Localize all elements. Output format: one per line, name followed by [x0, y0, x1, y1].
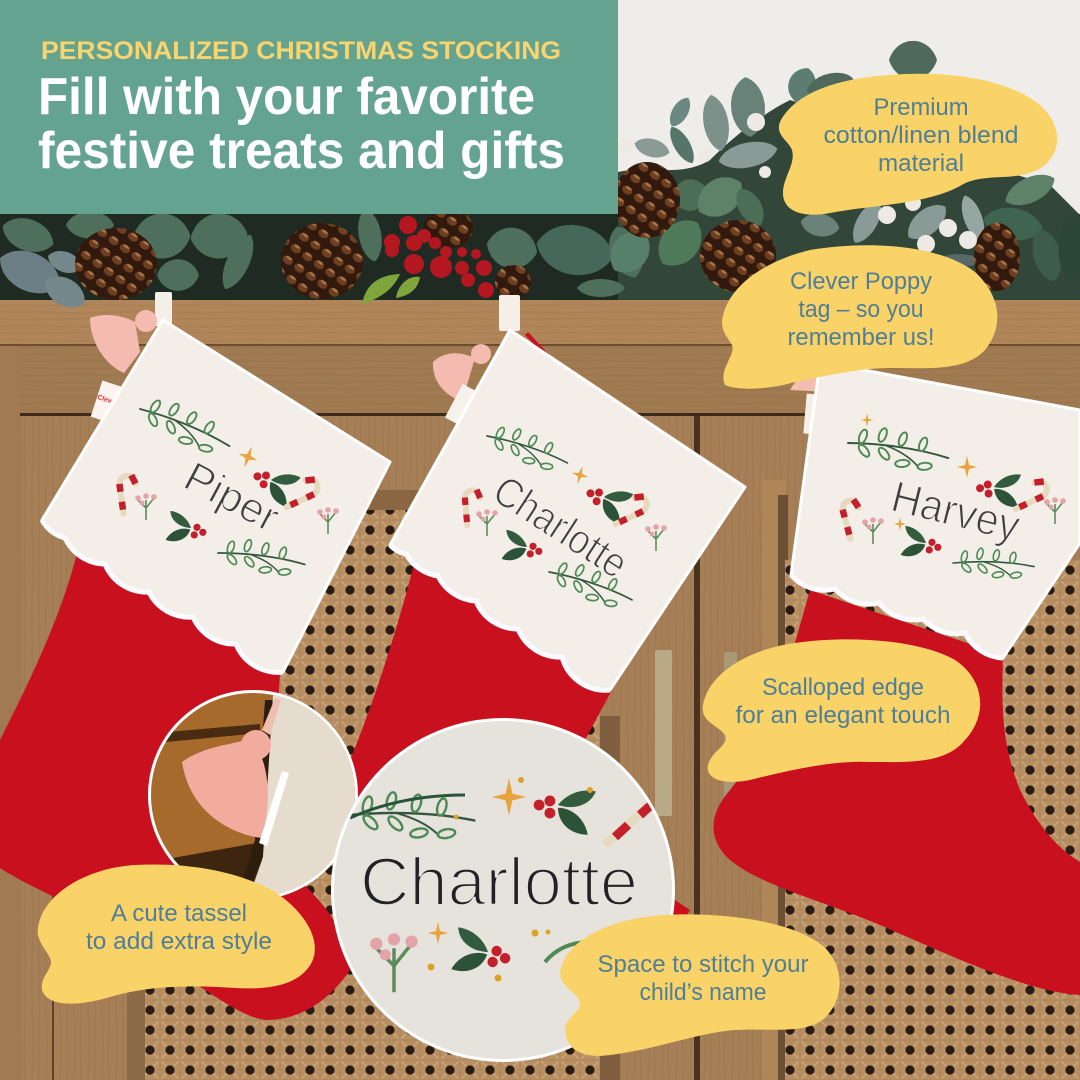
left embroidery	[118, 396, 339, 581]
header title line 2: festive treats and gifts	[38, 122, 565, 180]
name: Piper: Piper	[177, 452, 287, 541]
pinecones	[75, 162, 1020, 300]
green leaves under berries	[362, 274, 420, 305]
middle poppy tag	[445, 384, 475, 424]
middle scalloped edge	[390, 545, 610, 690]
header kicker: PERSONALIZED CHRISTMAS STOCKING	[41, 37, 561, 65]
lower holly	[451, 927, 510, 972]
stocking: Harvey	[714, 362, 1080, 995]
left red body	[0, 550, 350, 1020]
left cuff	[42, 320, 390, 672]
brass handle right	[724, 652, 737, 802]
header title line 1: Fill with your favorite	[38, 68, 535, 126]
lower sprig piece	[545, 942, 590, 962]
wall background	[0, 0, 1080, 300]
right tassel	[790, 366, 832, 392]
garland	[0, 41, 1080, 315]
callout: name space: Space to stitch your	[598, 951, 808, 978]
name: Harvey: Harvey	[887, 472, 1025, 551]
enlarged star	[492, 778, 526, 816]
white tag	[259, 771, 289, 846]
callout: tag: tag – so you	[798, 296, 924, 323]
wooden cabinet	[0, 300, 1080, 1080]
enlarged holly	[534, 791, 596, 835]
callout: material	[779, 74, 1057, 215]
left hanger loop	[155, 292, 172, 326]
stocking: Piper	[0, 292, 390, 1020]
right poppy tag	[803, 393, 822, 435]
name: Charlotte: Charlotte	[485, 466, 636, 587]
linen fabric	[254, 695, 355, 894]
stocking: Charlotte	[340, 295, 745, 960]
callout: tassel: A cute tassel	[111, 900, 247, 927]
enlarged cane	[605, 805, 650, 845]
inset circle: tassel detail	[145, 690, 365, 900]
middle hanger loop	[499, 295, 520, 331]
left tassel	[90, 310, 157, 373]
middle tassel	[433, 344, 491, 402]
callout: tag	[722, 245, 997, 389]
callout: scalloped edge: Scalloped edge	[762, 674, 924, 701]
name enlarged: Charlotte	[360, 844, 638, 920]
middle embroidery	[464, 425, 667, 609]
left poppy tag	[91, 381, 123, 423]
callout: tag: Clever Poppy	[790, 268, 932, 295]
callout: material: Premium	[874, 94, 968, 121]
callout: tassel	[38, 864, 315, 1004]
brass handle left	[655, 650, 672, 816]
red berries	[384, 216, 494, 298]
callout: name space: child’s name	[640, 979, 766, 1006]
callout: material: material	[878, 150, 964, 177]
left poppy tag: Clever	[96, 394, 119, 407]
callout: scalloped edge: for an elegant touch	[736, 702, 950, 729]
middle red body	[340, 560, 690, 960]
header panel	[0, 0, 618, 214]
red back edge	[525, 332, 580, 388]
top right foliage	[889, 41, 937, 79]
middle cuff	[390, 330, 745, 690]
right red body	[714, 590, 1080, 995]
callout: tag: remember us!	[788, 324, 934, 351]
right embroidery	[841, 413, 1066, 588]
rattan panel right	[785, 560, 1080, 1080]
enlarged sprig	[351, 791, 476, 840]
callout: scalloped edge	[703, 639, 980, 782]
callout: tassel: to add extra style	[86, 928, 272, 955]
gold dots	[428, 777, 593, 982]
callout: name space	[560, 914, 840, 1056]
rattan panel left	[145, 510, 600, 1080]
tassel	[182, 738, 268, 838]
left scalloped edge	[42, 520, 283, 672]
inset circle: name detail	[331, 718, 675, 1062]
callout: material: cotton/linen blend	[824, 122, 1018, 149]
right scalloped edge	[791, 575, 1003, 658]
right cuff	[791, 362, 1080, 658]
enlarged flower	[370, 933, 418, 992]
small star	[428, 922, 448, 944]
white snowberries	[617, 113, 977, 253]
